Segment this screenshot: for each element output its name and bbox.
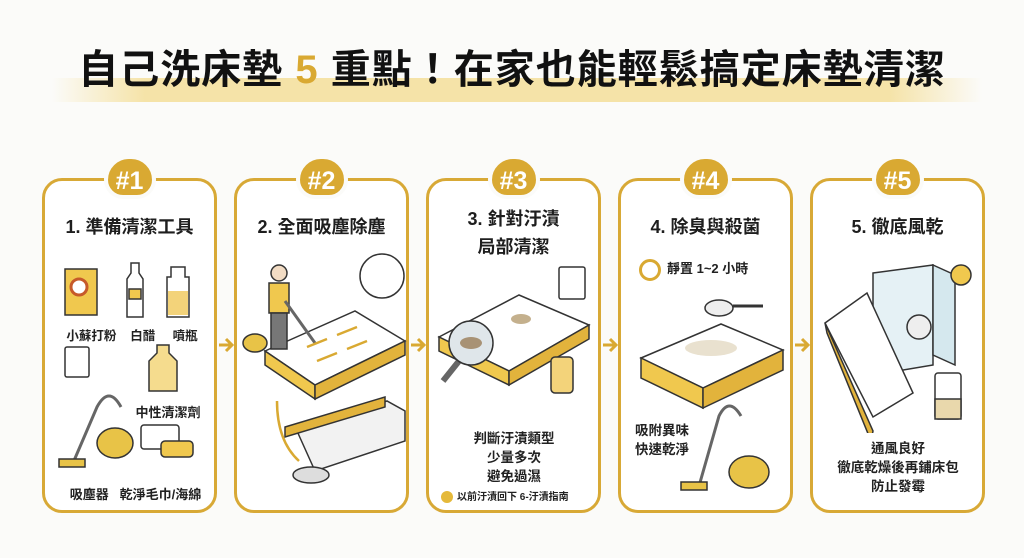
text 4 [635,423,689,457]
heading 3: 3. 針對汙漬 [467,209,560,229]
badge #3: #3 [500,167,527,195]
text 5: 通風良好 [871,441,925,456]
labels bottom: 吸塵器 乾淨毛巾/海綿 [70,487,201,502]
badge #5: #5 [884,167,911,195]
clock + time: 靜置 1~2 小時 [667,261,748,276]
panel: step 3 [426,178,601,513]
heading 2: 2. 全面吸塵除塵 [257,217,386,237]
heading 3: 局部清潔 [478,237,550,257]
text 4: 快速乾淨 [635,442,689,457]
clock + time [639,259,748,281]
panel: step 2 [234,178,409,513]
badge #4 [680,155,732,199]
title highlight band [52,78,982,102]
text 5: 防止發霉 [871,479,925,494]
illustration: baking soda sprinkle + vacuum [639,299,785,491]
illustration: vacuuming mattress [242,253,406,484]
badge #1 [104,155,156,199]
text 5: 徹底乾燥後再鋪床包 [837,460,959,475]
heading 5: 5. 徹底風乾 [851,217,944,237]
illustration: stain spot cleaning [438,266,591,394]
text 5 [837,441,959,494]
badge #3 [488,155,540,199]
text 3: 判斷汙漬類型 [474,431,554,446]
labels row 1: 小蘇打粉 白醋 噴瓶 [66,329,198,343]
heading 3 [467,209,560,257]
panel: step 1 [42,178,217,513]
label neutral cleaner: 中性清潔劑 [135,405,200,420]
arrow 3 [603,338,618,352]
badge #5 [872,155,924,199]
badge #4: #4 [692,167,719,195]
illustration: tools [58,262,194,468]
panel: step 5 [810,178,985,513]
panel: step 4 [618,178,793,513]
badge #1: #1 [116,167,143,195]
arrow 2 [411,338,426,352]
badge #2: #2 [308,167,335,195]
heading 4: 4. 除臭與殺菌 [650,217,760,237]
link note: 以前汙漬回下 6-汙漬指南 [457,492,569,503]
badge #2 [296,155,348,199]
title: 自己洗床墊 5 重點！在家也能輕鬆搞定床墊清潔 [78,48,946,92]
text 3: 避免過濕 [487,469,541,484]
text 3: 少量多次 [487,450,541,465]
text 4: 吸附異味 [635,423,689,438]
arrow 1 [219,338,234,352]
arrow 4 [795,338,810,352]
text 3 [474,431,554,484]
heading 1: 1. 準備清潔工具 [65,217,194,237]
illustration: drying mattress [824,264,972,433]
